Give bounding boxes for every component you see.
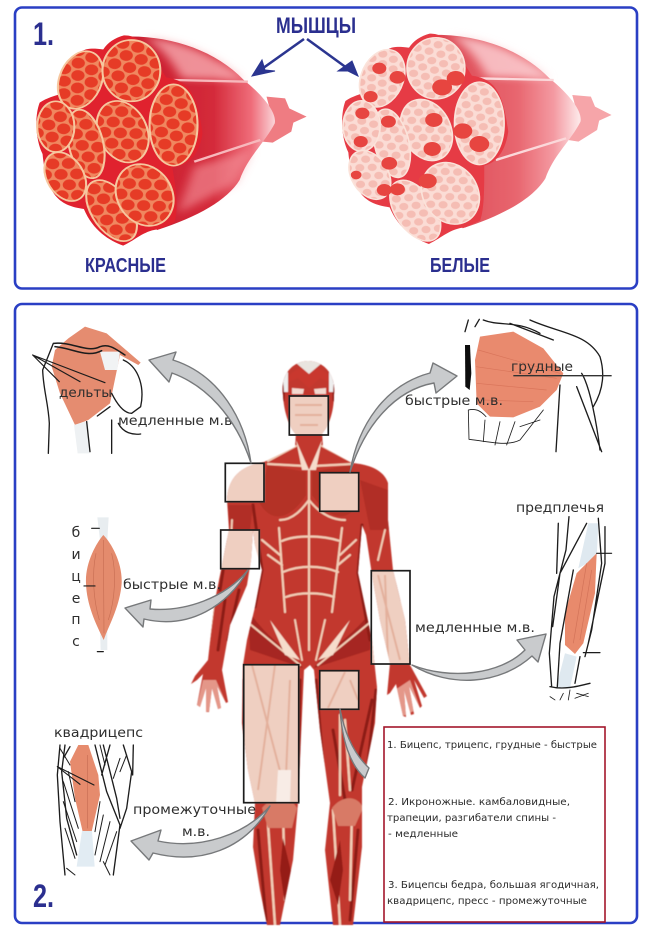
legend item 2: 2. Икроножные. камбаловидные, (388, 797, 570, 808)
red muscle illustration (36, 35, 307, 247)
legend item 3: квадрицепс, пресс - промежуточные (387, 896, 587, 907)
human muscle figure (191, 361, 427, 925)
legend item 2 (387, 797, 570, 840)
label: biceps (vertical): б (72, 525, 80, 541)
label: fast fibres (biceps): быстрые м.в. (123, 578, 221, 593)
arrow: shoulder to deltoid (149, 352, 251, 463)
arrow: forearm to inset (412, 634, 546, 680)
legend item 3: 3. Бицепсы бедра, большая ягодичная, (388, 880, 599, 891)
legend item 2: - медленные (388, 829, 458, 840)
highlight frames on the figure (221, 396, 410, 803)
white muscle illustration (341, 34, 612, 247)
label: quadriceps: квадрицепс (54, 726, 143, 741)
number 1: 1. (33, 16, 54, 52)
number 2: 2. (33, 878, 54, 914)
arrows to muscles (252, 39, 358, 76)
legend item 1: 1. Бицепс, трицепс, грудные - быстрые (387, 740, 597, 751)
heading: muscles: МЫШЦЫ (276, 13, 356, 38)
panel 2: muscle anatomy: м.в. (182, 825, 210, 840)
legend item 3 (387, 880, 599, 907)
label: pectorals: грудные (511, 360, 573, 375)
label: biceps (vertical): п (71, 612, 81, 628)
panel 1: muscle types (15, 8, 637, 288)
inset: forearm (549, 517, 612, 700)
inset: quadriceps (57, 745, 133, 875)
label: white: БЕЛЫЕ (430, 255, 490, 277)
label: red: КРАСНЫЕ (85, 255, 166, 277)
legend box (384, 727, 605, 922)
arrow: chest to pectoral (350, 363, 457, 472)
inset: pectoral (465, 319, 612, 452)
pale highlighted areas (221, 396, 410, 803)
arrow: biceps to inset (125, 570, 248, 627)
label: forearm: предплечья (516, 501, 604, 516)
inset: biceps (84, 517, 122, 652)
inset: deltoid (33, 327, 142, 453)
label: biceps (vertical): и (71, 547, 81, 563)
label: deltoids: дельты (59, 386, 112, 401)
label: biceps (vertical): с (72, 634, 80, 650)
panel 2: muscle anatomy (15, 304, 637, 925)
arrow: thigh to quadriceps (131, 806, 270, 860)
label: fast fibres (pectoral): быстрые м.в. (405, 394, 503, 409)
legend item 2: трапеции, разгибатели спины - (387, 813, 556, 824)
label: biceps (vertical) (71, 525, 81, 650)
label: slow fibres (forearm): медленные м.в. (415, 621, 535, 636)
arrow: inner thigh pointer (340, 709, 369, 778)
label: biceps (vertical): ц (71, 569, 81, 585)
label: slow fibres (deltoid): медленные м.в. (118, 414, 237, 429)
shading and fibres (216, 382, 378, 922)
label: biceps (vertical): е (72, 591, 80, 607)
label: intermediate fibres: промежуточные (133, 803, 256, 818)
